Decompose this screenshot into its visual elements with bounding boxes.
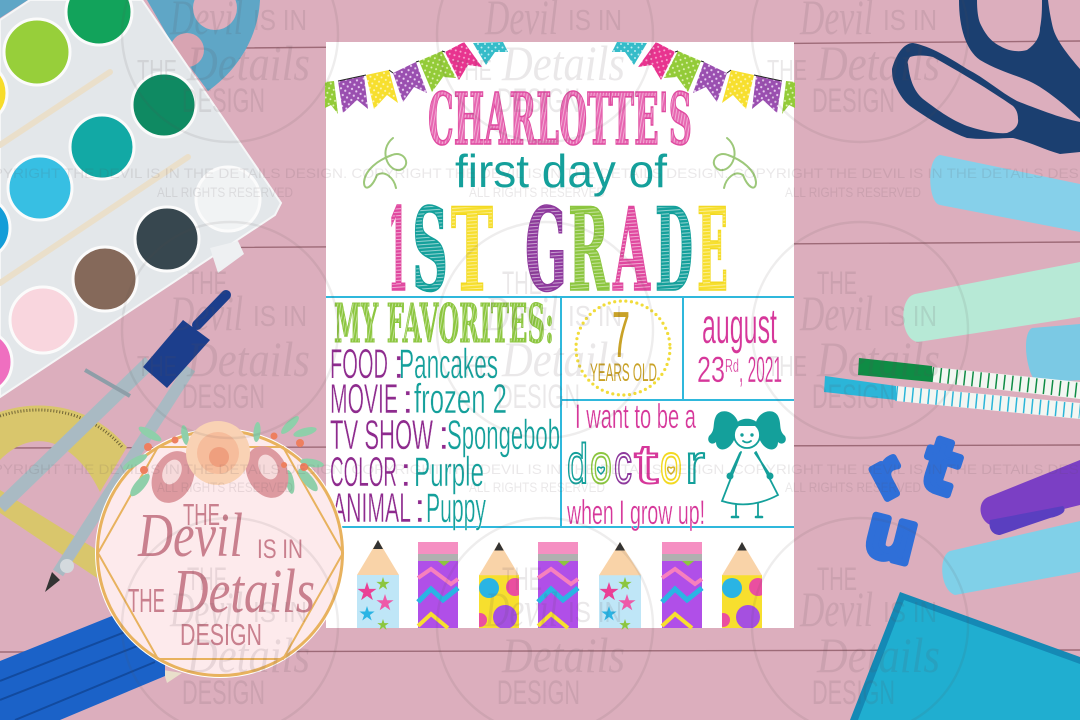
title: 1st grade: D — [655, 183, 693, 317]
color: Purple — [414, 448, 484, 495]
title: 1st grade: R — [568, 183, 610, 317]
career text: r — [685, 432, 705, 495]
pencil 7: polka dots — [716, 542, 767, 629]
watermark tile row 2: THE — [187, 265, 227, 301]
animal: Puppy — [426, 484, 486, 531]
floral crest — [121, 414, 325, 510]
blue colored pencils — [0, 616, 182, 720]
watermark tile row 2: THE — [452, 351, 492, 383]
watermark tile row 3 — [169, 561, 940, 712]
text: , 2021 — [739, 349, 782, 390]
watermark tile row 3: THE — [187, 561, 227, 597]
watermark copyright row 1: ALL RIGHTS RESERVED — [785, 184, 921, 200]
watermark tile row 2: IS IN — [568, 301, 622, 333]
curl left — [364, 138, 406, 188]
magnetic letters: r — [857, 438, 916, 514]
watermark copyright row 2: COPYRIGHT THE DEVIL IS IN THE DETAILS DESIGN. COPYRIGHT THE DEVIL IS IN THE DETAILS DESIGN. COPYRIGHT THE DEVIL IS IN THE DETAILS DESIGN. — [0, 461, 1080, 477]
pencil 1: stars — [357, 540, 399, 630]
age badge: 7 — [612, 298, 630, 371]
seal wordmark: THE — [183, 497, 220, 532]
watermark tile row 2: THE — [767, 351, 807, 383]
watermark tile row 1: IS IN — [253, 5, 307, 37]
watermark copyright row 1: ALL RIGHTS RESERVED — [469, 184, 605, 200]
food: Pancakes — [399, 340, 498, 387]
seal wordmark: IS IN — [257, 534, 303, 564]
title: 1st grade: G — [525, 183, 567, 317]
age badge: YEARS OLD — [590, 359, 657, 387]
seal wordmark: THE — [128, 582, 165, 619]
pencil 2: chevrons — [418, 542, 458, 628]
curl right — [714, 138, 756, 188]
date: Rd — [725, 356, 739, 376]
watermark tile row 1: DESIGN — [182, 82, 265, 120]
title: 1st grade: S — [412, 183, 448, 317]
poster — [326, 42, 794, 628]
watermark tile row 2: Devil — [169, 285, 243, 341]
compass — [0, 295, 226, 592]
watermark tile row 2 — [137, 265, 940, 416]
career text: when I grow up! — [566, 494, 705, 532]
watermark tile row 2: Devil — [799, 285, 873, 341]
watermark tile row 3: DESIGN — [497, 674, 580, 712]
teal notebook — [850, 592, 1080, 720]
paint wells — [0, 0, 260, 394]
watermark copyright row 2: ALL RIGHTS RESERVED — [785, 479, 921, 495]
watermark tile row 2: THE — [502, 265, 542, 301]
watermark tile row 3: DESIGN — [812, 674, 895, 712]
career text: d — [567, 432, 588, 495]
watermark tile row 1: Details — [186, 35, 310, 91]
animal: ANIMAL — [332, 484, 411, 531]
watermark tile row 2: THE — [137, 351, 177, 383]
striped pens — [824, 358, 1080, 419]
watermark tile row 3: IS IN — [568, 597, 622, 629]
purple marker — [981, 460, 1080, 535]
watercolor palette — [0, 0, 281, 397]
watermark tile row 1: DESIGN — [497, 82, 580, 120]
movie: MOVIE — [330, 375, 398, 422]
watermark tile row 3: Devil — [484, 581, 558, 637]
watermark copyright row 2: ALL RIGHTS RESERVED — [469, 479, 605, 495]
movie: frozen 2 — [414, 375, 507, 422]
tv show: TV SHOW — [330, 411, 433, 458]
subtitle: first day of: first day of — [455, 145, 667, 197]
text: E — [697, 183, 728, 317]
watermark tile row 1 — [137, 0, 940, 120]
career text: I want to be a — [575, 398, 696, 436]
watermark copyright row 2 — [0, 461, 1080, 495]
watermark tile row 2: Devil — [484, 285, 558, 341]
magnetic letters: t — [912, 421, 971, 512]
grid lines — [326, 297, 794, 527]
watermark tile row 3: THE — [817, 561, 857, 597]
bunting left — [325, 42, 508, 114]
watermark tile row 3: Details — [816, 627, 940, 683]
watermark copyright row 1: COPYRIGHT THE DEVIL IS IN THE DETAILS DESIGN. COPYRIGHT THE DEVIL IS IN THE DETAILS DESIGN. COPYRIGHT THE DEVIL IS IN THE DETAILS DESIGN. — [0, 165, 1080, 181]
text: CHARLOTTE'S — [428, 77, 692, 161]
watermark tile row 2: DESIGN — [182, 378, 265, 416]
seal wordmark: Details — [172, 558, 315, 626]
pencil 6: chevrons — [662, 542, 702, 628]
watermark tile row 1: THE — [137, 55, 177, 87]
career text: o — [590, 432, 612, 495]
career text: c — [614, 432, 632, 495]
watermark rings — [122, 0, 968, 720]
date: 23 — [697, 349, 725, 390]
watermark tile row 2: DESIGN — [812, 378, 895, 416]
watermark tile row 3: Details — [186, 627, 310, 683]
career text: t — [634, 432, 659, 495]
scissors — [892, 0, 1080, 154]
seal wordmark — [128, 497, 315, 652]
seal wordmark: Devil — [137, 502, 243, 570]
protractor: blue — [0, 0, 260, 91]
pencil 4: chevrons — [538, 542, 578, 628]
date: august — [702, 298, 777, 354]
watermark tile row 2: IS IN — [883, 301, 937, 333]
favorites list — [330, 340, 560, 531]
food: FOOD — [330, 340, 388, 387]
watermark tile row 1: THE — [767, 55, 807, 87]
date — [697, 298, 782, 390]
age badge — [576, 298, 670, 395]
watermark tile row 1: IS IN — [568, 5, 622, 37]
hearts in letters — [598, 467, 674, 474]
watermark tile row 3: Details — [501, 627, 625, 683]
career text — [566, 398, 705, 532]
movie: : — [402, 375, 414, 422]
watermark tile row 2: Details — [816, 331, 940, 387]
color: COLOR — [330, 448, 397, 495]
pencil 5: stars — [599, 542, 641, 630]
watermark copyright row 1: ALL RIGHTS RESERVED — [157, 184, 293, 200]
watermark tile row 2: IS IN — [253, 301, 307, 333]
pencil 3: polka dots — [473, 542, 524, 629]
career text: o — [660, 432, 682, 495]
watermark tile row 3: Devil — [169, 581, 243, 637]
yellow protractor and ruler — [0, 405, 127, 578]
title: 1st grade: 1 — [388, 183, 408, 317]
title: 1st grade: A — [613, 183, 651, 317]
watermark tile row 2: Details — [186, 331, 310, 387]
title: 1st grade: T — [451, 183, 493, 317]
food: : — [393, 340, 405, 387]
watermark tile row 3: IS IN — [883, 597, 937, 629]
watermark tile row 2: DESIGN — [497, 378, 580, 416]
magnetic letters — [857, 421, 971, 581]
watermark tile row 3: DESIGN — [182, 674, 265, 712]
tv show: Spongebob — [447, 411, 560, 458]
seal wordmark: DESIGN — [180, 617, 262, 652]
magnetic letters: u — [857, 487, 927, 581]
brand seal — [95, 414, 345, 678]
watermark tile row 3: THE — [502, 561, 542, 597]
watermark tile row 2: THE — [817, 265, 857, 301]
text: MY FAVORITES: — [334, 293, 554, 355]
animal: : — [414, 484, 426, 531]
tv show: : — [438, 411, 450, 458]
watermark tile row 1: THE — [452, 55, 492, 87]
watermark tile row 1: DESIGN — [812, 82, 895, 120]
watermark tile row 2: Details — [501, 331, 625, 387]
brushes — [0, 72, 188, 283]
watermark tile row 1: Details — [501, 35, 625, 91]
pencils row — [357, 540, 767, 630]
watermark tile row 3: Devil — [799, 581, 873, 637]
watermark copyright row 1 — [0, 165, 1080, 200]
watermark tile row 1: IS IN — [883, 5, 937, 37]
girl icon — [708, 411, 786, 517]
watermark copyright row 2: ALL RIGHTS RESERVED — [157, 479, 293, 495]
bunting right — [612, 42, 795, 114]
chalk sticks — [903, 155, 1080, 595]
watermark tile row 1: Details — [816, 35, 940, 91]
color: : — [400, 448, 412, 495]
watermark tile row 3: IS IN — [253, 597, 307, 629]
